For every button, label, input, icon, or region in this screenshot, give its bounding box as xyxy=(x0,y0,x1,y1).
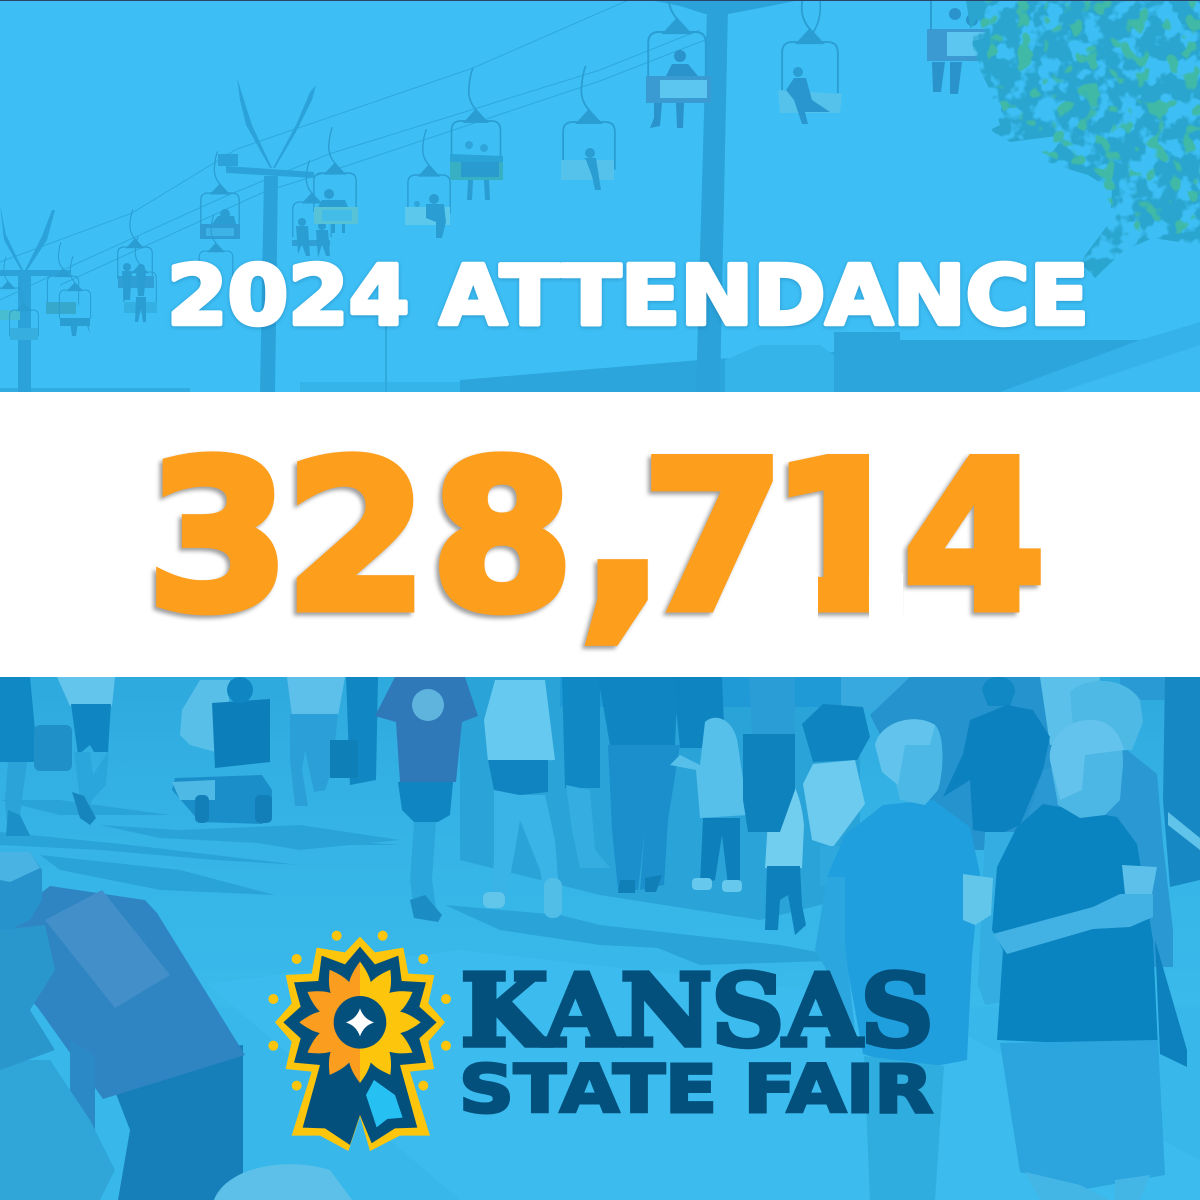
chair lifts with riders xyxy=(0,0,990,340)
chair M xyxy=(778,0,842,124)
chair D xyxy=(199,151,240,282)
chair E xyxy=(292,160,331,258)
chair A xyxy=(450,68,503,200)
icon: rosette ribbon with sunflower xyxy=(268,931,451,1151)
white cover trimming the left foot of the digit one xyxy=(768,574,818,624)
white band xyxy=(0,392,1200,677)
panel: sky lift photo with blue overlay xyxy=(0,0,1200,392)
attendance number: 328,714: 1 xyxy=(770,419,913,657)
shadows on road xyxy=(0,707,860,965)
attendance number: 328,714: 3 xyxy=(147,419,290,657)
dots around rosette xyxy=(268,931,451,1091)
sunflower petals xyxy=(299,962,421,1083)
attendance number: 328,714: 4 xyxy=(903,419,1046,657)
head bottom centre xyxy=(214,1164,352,1200)
wordmark: KANSAS: KANSAS xyxy=(461,954,933,1069)
dark shirt man xyxy=(943,677,1050,1005)
man with drink in black shirt xyxy=(992,720,1165,1200)
building: brick and low roofs xyxy=(0,322,1200,392)
road shading xyxy=(207,950,1200,1200)
attendance number: 328,714: , xyxy=(578,391,667,664)
panel: crowd photo with blue overlay xyxy=(0,677,1200,1200)
chair far left pair xyxy=(0,242,91,340)
tower: right xyxy=(656,1,794,360)
walker with dark shorts xyxy=(57,677,115,825)
walker in jeans xyxy=(287,677,345,806)
stroller and seated figure xyxy=(743,677,795,832)
cables xyxy=(0,0,705,300)
tower: left xyxy=(218,78,316,392)
chair F xyxy=(118,210,154,300)
attendance number: 328,714: 2 xyxy=(285,419,428,657)
tower: far left xyxy=(0,205,70,392)
small child in white xyxy=(765,772,806,935)
tree foliage xyxy=(966,0,1200,278)
woman with black top and white skirt xyxy=(802,704,870,846)
chair C xyxy=(314,127,358,233)
attendance number: 328,714: 8 xyxy=(431,419,574,657)
mobility scooter and rider xyxy=(172,677,272,824)
man bottom left, bending xyxy=(0,852,245,1200)
stroller and dark walker xyxy=(330,677,378,785)
right edge machinery xyxy=(1163,677,1200,887)
woman in overalls xyxy=(815,719,993,1200)
plants bottom left xyxy=(0,925,115,1200)
chair B xyxy=(405,129,450,238)
walker in white shirt xyxy=(483,680,562,918)
man behind, glasses xyxy=(1027,681,1187,1067)
attendance number: 328,714: 7 xyxy=(642,419,785,657)
chair N xyxy=(927,0,990,94)
ribbon tab xyxy=(366,1080,403,1127)
crowd: background band xyxy=(560,677,1200,850)
chair L xyxy=(646,0,711,128)
title: 2024 ATTENDANCE: 2024 ATTENDANCE xyxy=(167,249,1089,344)
far left walker xyxy=(0,677,38,836)
wordmark: STATE FAIR: STATE FAIR xyxy=(459,1051,933,1128)
walker with dark shirt xyxy=(673,677,725,748)
child in light jacket xyxy=(670,718,748,892)
walker dark, jeans xyxy=(562,677,680,893)
chair G xyxy=(124,237,157,322)
walker in maroon shirt xyxy=(375,677,478,922)
scooter small xyxy=(34,725,72,771)
white cover trimming the right foot of the digit one xyxy=(869,574,903,624)
chair O xyxy=(561,66,615,190)
logo: Kansas State Fair xyxy=(268,931,933,1151)
tent xyxy=(1000,322,1200,392)
edge line xyxy=(0,0,1200,1)
